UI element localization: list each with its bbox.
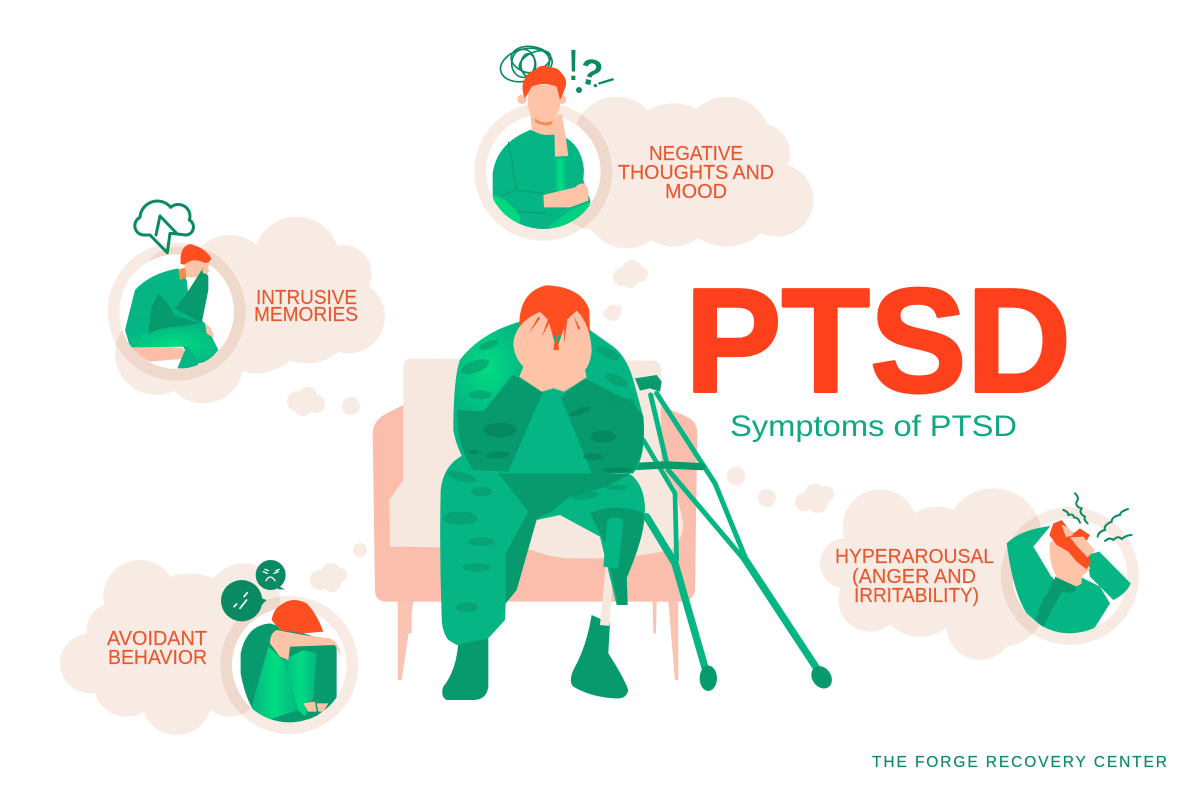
- thought puffs: small decorative clouds: [287, 260, 834, 592]
- icon: exclamation and question marks: !: [567, 42, 579, 90]
- icon: scribble thoughts: [497, 43, 554, 87]
- illustration: man thinking: [493, 66, 591, 237]
- label: avoidant behavior: [107, 628, 207, 669]
- label: avoidant behavior: AVOIDANT: [107, 628, 207, 650]
- label: intrusive memories: INTRUSIVE: [256, 287, 357, 309]
- illustration: man clutching head: [1007, 520, 1131, 637]
- ring: [220, 596, 358, 734]
- panel: intrusive memories: [108, 201, 385, 403]
- label: hyperarousal: IRRITABILITY): [854, 585, 979, 607]
- icon: exclamation and question marks: [567, 42, 613, 95]
- prosthetic socket: [603, 517, 623, 568]
- label: intrusive memories: MEMORIES: [254, 304, 358, 326]
- crutches: [632, 375, 836, 692]
- label: negative thoughts and mood: THOUGHTS AND: [618, 162, 774, 184]
- subtitle: Symptoms of PTSD: [730, 410, 1017, 443]
- arms: [457, 375, 644, 474]
- panel: hyperarousal: [820, 488, 1139, 660]
- panel: avoidant behavior: [60, 560, 358, 735]
- footer credit: THE FORGE RECOVERY CENTER: [872, 754, 1167, 771]
- label: hyperarousal: HYPERAROUSAL: [835, 546, 994, 568]
- illustration: person hugging knees: [241, 600, 341, 723]
- cloud: avoidant behavior: [60, 560, 280, 735]
- label: hyperarousal: [835, 546, 994, 607]
- icon: sad speech bubbles: [221, 560, 286, 621]
- cloud: negative thoughts: [560, 97, 813, 248]
- icon: storm cloud with lightning: [135, 201, 193, 253]
- icon: stress squiggles: [1063, 493, 1132, 541]
- trousers: [440, 455, 645, 645]
- armchair: [373, 358, 697, 680]
- illustration: man with head in hand: [125, 244, 218, 368]
- ring: [108, 243, 246, 381]
- boots: [442, 615, 628, 700]
- ring: [474, 103, 612, 241]
- torso: [453, 322, 644, 473]
- label: negative thoughts and mood: NEGATIVE: [649, 143, 743, 165]
- illustration: soldier on armchair with crutches: [373, 285, 836, 700]
- cloud: intrusive memories: [115, 217, 385, 403]
- title: PTSD: PTSD: [685, 258, 1071, 424]
- ring: [1001, 507, 1139, 645]
- label: intrusive memories: [254, 287, 358, 326]
- panel: negative thoughts and mood: [474, 42, 813, 248]
- label: hyperarousal: (ANGER AND: [852, 566, 976, 588]
- camouflage pattern: [443, 338, 635, 612]
- label: negative thoughts and mood: [618, 143, 774, 203]
- label: avoidant behavior: BEHAVIOR: [108, 647, 207, 669]
- label: negative thoughts and mood: MOOD: [665, 181, 727, 203]
- cloud: hyperarousal: [820, 488, 1043, 660]
- prosthetic leg: [600, 563, 614, 626]
- head and hands: [513, 285, 592, 392]
- icon: exclamation and question marks: ?: [576, 50, 606, 95]
